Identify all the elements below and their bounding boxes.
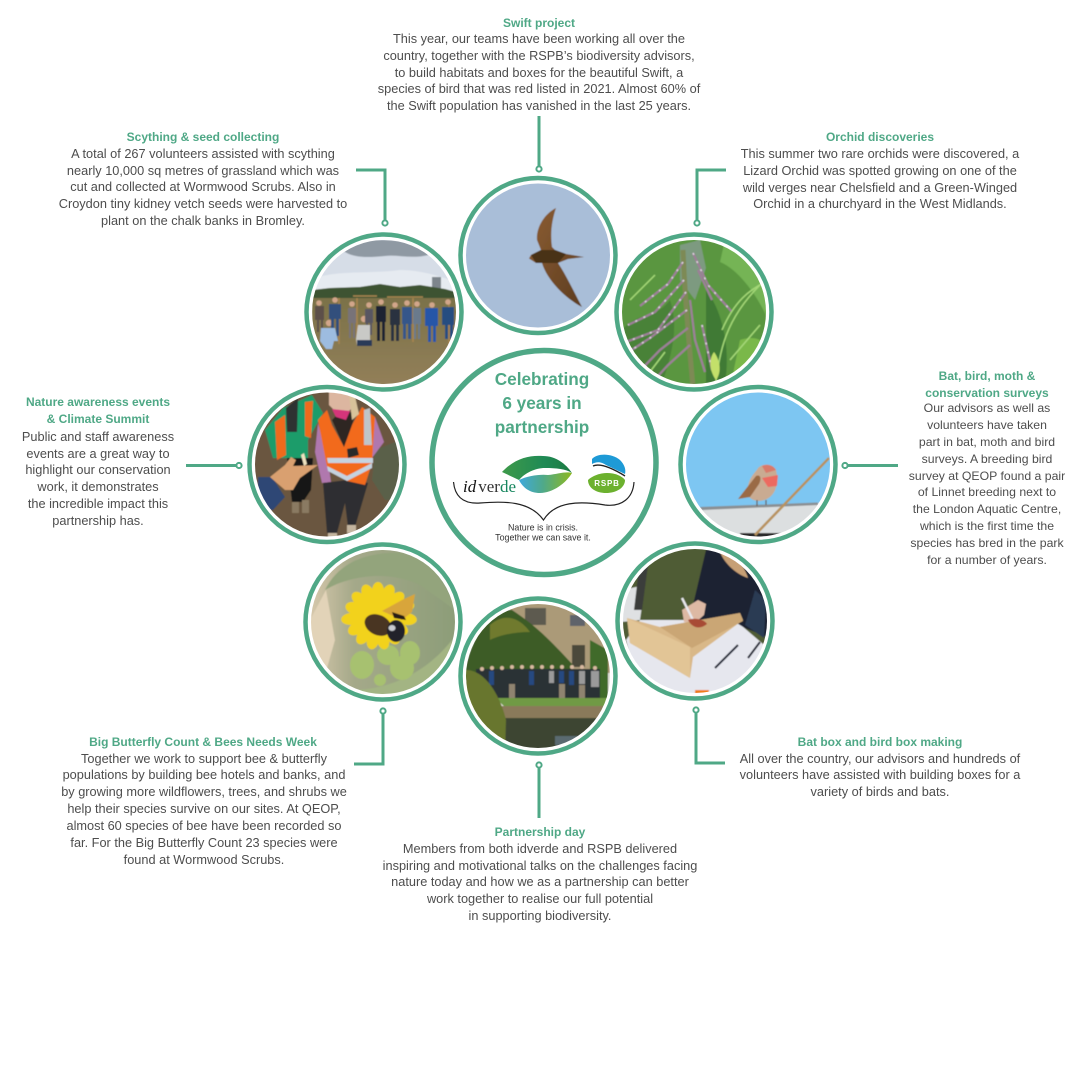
heading: celebrating 6 years in partnership: 6 years in (502, 393, 582, 413)
connector: nature awareness (186, 463, 242, 468)
text block: scything: nearly 10,000 sq metres of grassland which was (67, 163, 339, 178)
connector: partnership day (536, 762, 542, 818)
connector: orchid (694, 170, 726, 226)
tagline: Nature is in crisis. (508, 522, 578, 532)
text block: scything (59, 146, 347, 228)
text block: nature awareness: work, it demonstrates (36, 479, 159, 494)
heading: surveys: Bat, bird, moth & (939, 369, 1036, 383)
text block: butterfly count: far. For the Big Butterfly Count 23 species were (70, 835, 338, 850)
text block: butterfly count: by growing more wildflowers, trees, and shrubs we (61, 784, 347, 799)
text block: partnership day: Members from both idverde and RSPB delivered (403, 841, 677, 856)
text block: orchid discoveries: Lizard Orchid was spotted growing on one of the (743, 163, 1017, 178)
heading: celebrating 6 years in partnership: partnership (495, 417, 589, 437)
connector: bat box (693, 707, 725, 763)
text block: bat box (740, 751, 1021, 799)
panel: bat, bird, moth and conservation surveys (680, 369, 1065, 567)
heading: nature awareness: Nature awareness events (26, 395, 170, 409)
photo: people in orange vests (250, 387, 405, 543)
panel: nature awareness events and climate summit (22, 387, 405, 543)
heading: bat box: Bat box and bird box making (798, 735, 962, 749)
text block: nature awareness: highlight our conservation (25, 462, 171, 477)
photo: volunteers in a field (306, 234, 462, 390)
text block: scything: plant on the chalk banks in Bromley. (101, 213, 305, 228)
text block: orchid discoveries: This summer two rare orchids were discovered, a (741, 146, 1020, 161)
text block: butterfly count: help their species survive on our sites. At QEOP, (67, 801, 341, 816)
text block: nature awareness: partnership has. (52, 513, 144, 528)
photo: swift in flight (460, 178, 620, 333)
connector: scything (356, 170, 388, 226)
text block: partnership day (383, 841, 697, 923)
tagline (495, 522, 591, 542)
text block: surveys: surveys. A breeding bird (922, 452, 1053, 466)
brace under logos (454, 482, 634, 520)
text block: swift project: This year, our teams have been working all over the (393, 31, 685, 46)
text block: swift project (378, 31, 701, 113)
text block: orchid discoveries: Orchid in a churchyard in the West Midlands. (753, 196, 1007, 211)
heading: surveys (925, 369, 1049, 400)
heading: scything: Scything & seed collecting (127, 130, 279, 144)
text block: surveys: part in bat, moth and bird (919, 435, 1055, 449)
text block: surveys: the London Aquatic Centre, (913, 502, 1061, 516)
text block: swift project: the Swift population has vanished in the last 25 years. (387, 98, 691, 113)
logo: RSPB: RSPB (594, 479, 620, 488)
text block: nature awareness: Public and staff awareness (22, 429, 174, 444)
tagline: Together we can save it. (495, 532, 591, 542)
text block: surveys: species has bred in the park (910, 536, 1064, 550)
text block: butterfly count: Together we work to support bee & butterfly (81, 751, 328, 766)
heading: orchid discoveries: Orchid discoveries (826, 130, 934, 144)
heading: celebrating 6 years in partnership: Celebrating (495, 369, 589, 389)
text block: bat box: variety of birds and bats. (811, 784, 949, 799)
text block: partnership day: in supporting biodiversity. (469, 908, 611, 923)
text block: partnership day: nature today and how we as a partnership can better (391, 874, 690, 889)
heading: butterfly count: Big Butterfly Count & Bees Needs Week (89, 735, 317, 749)
logo: RSPB (588, 455, 625, 493)
connector: butterfly count (354, 708, 386, 764)
text block: butterfly count: almost 60 species of bee have been recorded so (66, 818, 342, 833)
text block: bat box: volunteers have assisted with building boxes for a (740, 767, 1021, 782)
text block: scything: A total of 267 volunteers assisted with scything (71, 146, 335, 161)
text block: orchid discoveries: wild verges near Chelsfield and a Green-Winged (742, 180, 1017, 195)
photo: linnet on a gutter (680, 387, 836, 543)
text block: scything: cut and collected at Wormwood Scrubs. Also in (70, 179, 336, 194)
heading: nature awareness (26, 395, 170, 426)
heading: swift project: Swift project (503, 16, 575, 30)
panel: bat box and bird box making (618, 544, 1021, 799)
heading: celebrating 6 years in partnership (495, 369, 589, 437)
text block: surveys (909, 401, 1065, 567)
text block: partnership day: inspiring and motivational talks on the challenges facing (383, 858, 697, 873)
text block: butterfly count: populations by building bee hotels and banks, and (63, 767, 345, 782)
connector: surveys (842, 463, 898, 468)
text block: surveys: Our advisors as well as (924, 401, 1050, 415)
photo: writing on a wooden box (618, 544, 772, 700)
panel: central partnership badge (432, 350, 656, 574)
photo: lizard orchid (616, 234, 772, 390)
panel: swift project (378, 16, 701, 333)
heading: nature awareness: & Climate Summit (47, 412, 149, 426)
panel: partnership day (383, 598, 697, 923)
panel: orchid discoveries (616, 130, 1020, 390)
heading: surveys: conservation surveys (925, 386, 1049, 400)
text block: surveys: survey at QEOP found a pair (909, 469, 1065, 483)
text block: swift project: species of bird that was red listed in 2021. Almost 60% of (378, 81, 701, 96)
text block: orchid discoveries (741, 146, 1020, 211)
heading: partnership day: Partnership day (495, 825, 586, 839)
logo: idverde: idverde (463, 477, 516, 496)
photo: bee on a yellow flower (306, 544, 460, 700)
text block: swift project: to build habitats and boxes for the beautiful Swift, a (395, 65, 684, 80)
panel: scything and seed collecting (59, 130, 462, 390)
text block: surveys: volunteers have taken (927, 418, 1047, 432)
text block: partnership day: work together to realise our full potential (426, 891, 653, 906)
photo: group in front of a building (460, 598, 620, 755)
text block: surveys: which is the first time the (919, 519, 1054, 533)
text block: nature awareness (22, 429, 174, 528)
text block: scything: Croydon tiny kidney vetch seeds were harvested to (59, 196, 347, 211)
connector: swift (536, 116, 542, 172)
text block: nature awareness: the incredible impact this (28, 496, 168, 511)
text block: nature awareness: events are a great way to (26, 446, 170, 461)
panel: big butterfly count and bees needs week (61, 544, 460, 867)
text block: bat box: All over the country, our advisors and hundreds of (740, 751, 1021, 766)
text block: butterfly count: found at Wormwood Scrubs. (124, 852, 284, 867)
text block: surveys: for a number of years. (927, 553, 1047, 567)
text block: surveys: of Linnet breeding next to (918, 485, 1056, 499)
text block: butterfly count (61, 751, 347, 867)
text block: swift project: country, together with the RSPB’s biodiversity advisors, (383, 48, 695, 63)
logo: idverde (463, 456, 572, 496)
